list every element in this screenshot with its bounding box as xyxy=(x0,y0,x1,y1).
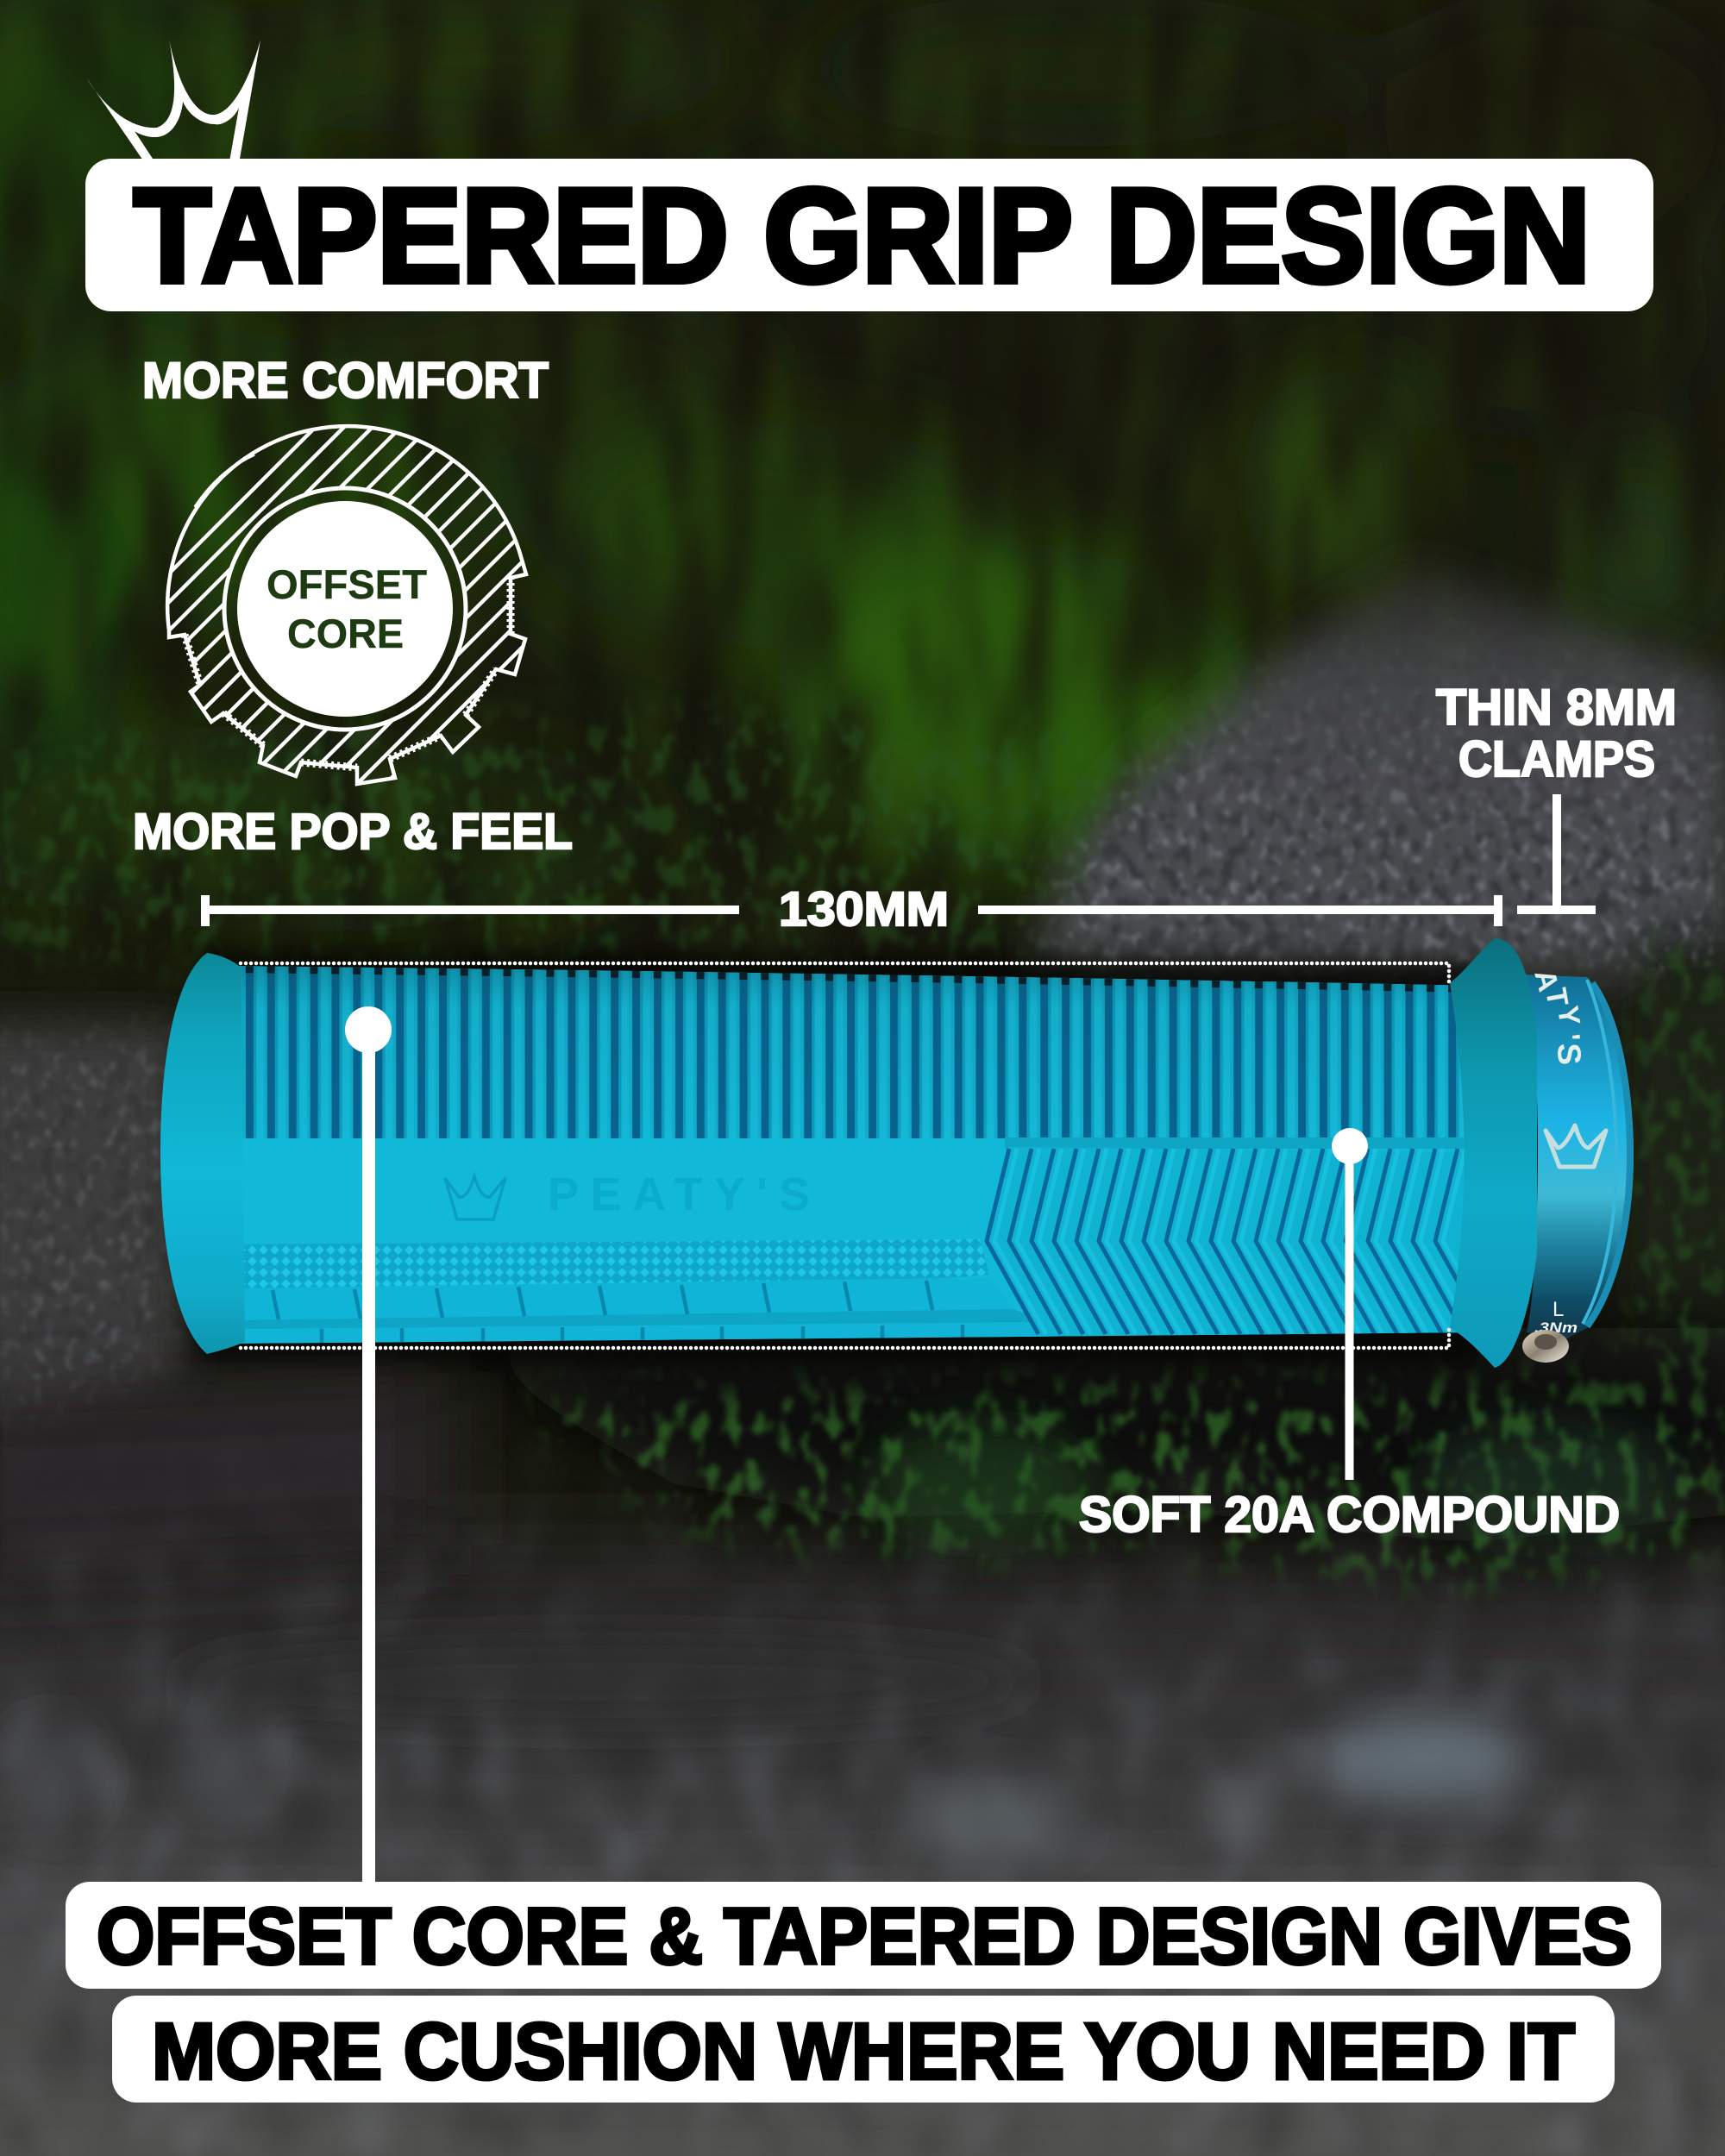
clamp lettering: Y xyxy=(1551,1004,1586,1028)
callout: cushion marker xyxy=(345,1006,392,1883)
core ring xyxy=(224,488,466,730)
clamp crown mark xyxy=(1546,1125,1606,1167)
rock lower area xyxy=(0,1544,1725,2156)
outer grip profile xyxy=(167,426,526,784)
title banner: TAPERED GRIP DESIGN xyxy=(134,160,1590,310)
callout: soft compound marker xyxy=(1332,1128,1368,1480)
core disc xyxy=(237,501,453,717)
chevron treads xyxy=(987,1147,1495,1338)
product: teal grip xyxy=(160,938,1634,1368)
label: more pop and feel: MORE POP & FEEL xyxy=(133,804,573,860)
crown logo xyxy=(86,33,260,159)
hatched grip section xyxy=(129,182,561,1040)
clamp lettering: A xyxy=(1527,966,1565,995)
rib top notches xyxy=(224,967,1475,987)
bottom banner: line two: MORE CUSHION WHERE YOU NEED IT xyxy=(152,2006,1575,2096)
right flange xyxy=(1450,938,1537,1368)
mid band between ribs and chevrons xyxy=(1005,1138,1475,1149)
clamp lettering: S xyxy=(1550,1043,1587,1066)
label: thin 8mm clamps: THIN 8MM xyxy=(1436,680,1677,736)
130mm dimension line: 130MM xyxy=(779,881,949,936)
core label xyxy=(267,561,427,656)
clamp collar: .3Nm xyxy=(1534,1319,1578,1336)
tread blocks xyxy=(229,1278,1057,1345)
embossed logo: PEATY'S xyxy=(548,1169,810,1220)
shadow around grip xyxy=(194,949,1484,1363)
clamp lettering: ' xyxy=(1552,1032,1586,1043)
dotted outline: tapered profile xyxy=(241,963,1449,1348)
left end cap xyxy=(160,953,245,1354)
label: soft 20a compound: SOFT 20A COMPOUND xyxy=(1079,1487,1620,1543)
label: thin 8mm clamps: CLAMPS xyxy=(1458,731,1655,787)
clamp collar xyxy=(1522,966,1634,1363)
clamp bolt xyxy=(1522,1330,1569,1363)
clamp width bracket xyxy=(1517,794,1596,914)
core label: OFFSET xyxy=(267,561,427,607)
clamp lettering xyxy=(1527,966,1587,1066)
knurled band xyxy=(229,1239,989,1288)
label: thin 8mm clamps xyxy=(1436,680,1677,787)
straight ribs xyxy=(240,966,1459,1138)
label: more comfort: MORE COMFORT xyxy=(142,353,549,409)
clamp lettering: T xyxy=(1539,986,1574,1009)
130mm dimension line xyxy=(201,881,1502,936)
torque marking: L xyxy=(1552,1298,1564,1321)
grip body xyxy=(226,966,1475,1344)
offset core cross-section diagram xyxy=(129,182,561,1040)
bottom banner: line one: OFFSET CORE & TAPERED DESIGN GIVES xyxy=(97,1891,1632,1981)
serrated tread edge xyxy=(185,578,511,768)
core label: CORE xyxy=(287,611,404,656)
